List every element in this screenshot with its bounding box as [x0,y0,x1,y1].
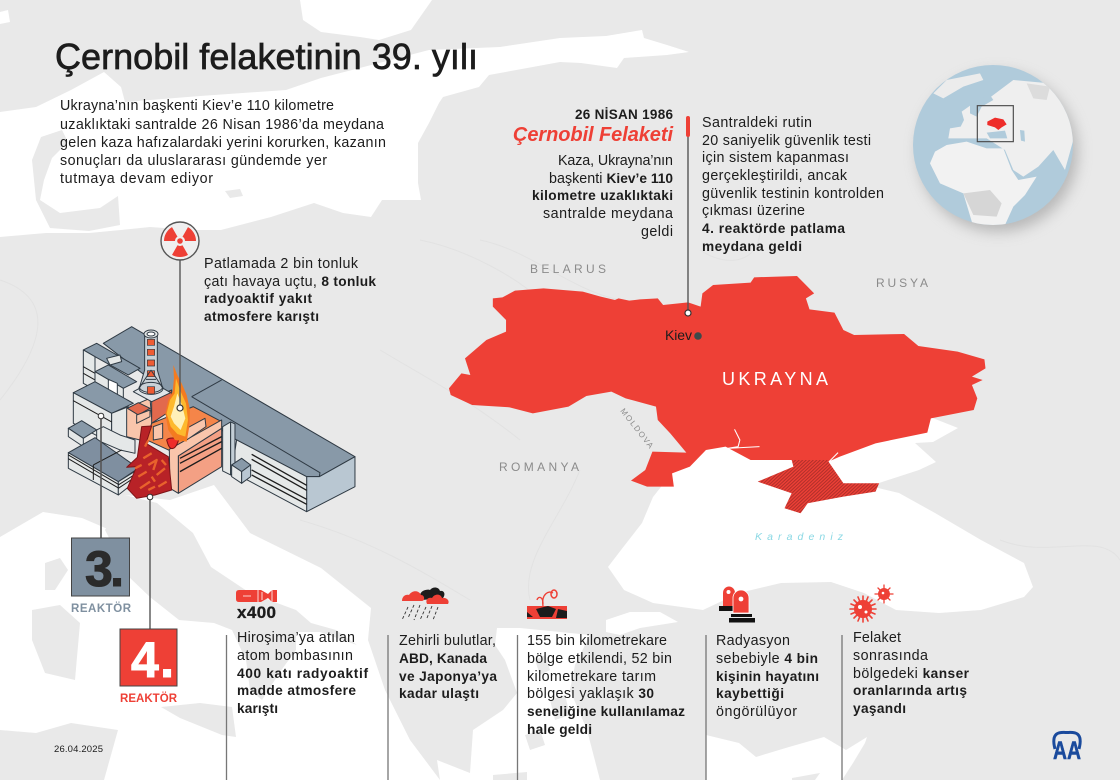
column: clouds: ABD, Kanada [399,651,487,666]
date block: Kaza, Ukrayna’nın [558,153,673,169]
column: clouds [399,633,497,701]
left buildings [68,343,140,495]
main turbine hall [103,327,355,512]
column: deaths: Radyasyon [716,633,790,649]
column: land: kilometrekare tarım [527,669,656,685]
explosion callout: Patlamada 2 bin tonluk [204,256,359,272]
explosion callout: çatı havaya uçtu, 8 tonluk [204,274,376,290]
reactor 4 marker: 4. [131,632,174,688]
Kiev marker: Kiev [665,327,692,343]
right text block: için sistem kapanması [702,150,849,166]
icon: toxic clouds [402,587,449,620]
column: clouds: ve Japonya’ya [399,669,497,684]
right text block: çıkması üzerine [702,203,805,219]
date block [513,107,673,240]
date block: geldi [641,224,673,240]
intro text: Ukrayna’nın başkenti Kiev’e 110 kilometre [60,98,334,114]
country labels [499,262,928,543]
column: cancer: Felaket [853,630,901,646]
icon: sirens [719,586,755,622]
date block: 26 NİSAN 1986 [575,107,673,122]
country labels: UKRAYNA [722,369,828,389]
explosion callout: radyoaktif yakıt [204,291,312,306]
column: land: 155 bin kilometrekare [527,633,667,649]
column: Hiroshima: karıştı [237,701,278,716]
right text block: güvenlik testinin kontrolden [702,186,884,202]
icon: radiation symbol [161,222,199,411]
lava flow [127,426,172,498]
date block: başkenti Kiev’e 110 [549,171,673,187]
fire [165,365,190,442]
column: Hiroshima: 400 katı radyoaktif [237,666,368,681]
column: cancer: yaşandı [853,701,906,716]
column: Hiroshima [237,630,368,716]
column: deaths: kişinin hayatını [716,669,819,684]
date block: santralde meydana [543,206,673,222]
column: land [527,633,685,737]
country labels: BELARUS [530,262,606,276]
right text block: Santraldeki rutin [702,115,812,131]
chimney [133,330,171,402]
column: land: seneliğine kullanılamaz [527,704,685,719]
pillar and annex [223,422,251,483]
date block: Çernobil Felaketi [513,124,673,146]
country labels: ROMANYA [499,460,579,474]
column: cancer: sonrasında [853,648,928,664]
right text block: 20 saniyelik güvenlik testi [702,133,871,149]
date: 26.04.2025 [54,744,103,755]
country labels: MOLDOVA [618,407,655,451]
logo: AA [1053,732,1081,765]
column: clouds: Zehirli bulutlar, [399,633,496,649]
column: cancer [853,630,970,716]
right text block [702,115,884,254]
column: deaths [716,633,819,720]
column: Hiroshima: Hiroşima’ya atılan [237,630,355,646]
title: Çernobil felaketinin 39. yılı [55,36,478,77]
right text block: 4. reaktörde patlama [702,221,845,236]
reactor illustration [68,327,355,512]
column: deaths: sebebiyle 4 bin [716,651,818,667]
column dividers [226,635,842,780]
column: Hiroshima: atom bombasının [237,648,353,664]
reactor 3 marker [71,413,132,615]
column: cancer: oranlarında artış [853,683,967,698]
globe locator [913,65,1078,232]
right text block: gerçekleştirildi, ancak [702,168,848,184]
timeline pointer [685,116,691,316]
column: Hiroshima: madde atmosfere [237,683,356,698]
explosion callout: atmosfere karıştı [204,309,319,324]
map: Ukraine [449,276,985,513]
icon: cracked soil plant [527,590,567,619]
column: deaths: öngörülüyor [716,704,797,720]
intro text: tutmaya devam ediyor [60,171,213,187]
column: clouds: kadar ulaştı [399,686,479,701]
reactor 3 marker: 3. [85,541,124,597]
column: land: hale geldi [527,722,592,737]
reactor 4 marker [120,494,178,705]
column: cancer: bölgedeki kanser [853,666,970,682]
reactor core block [127,390,222,493]
column: land: bölgesi yaklaşık 30 [527,686,654,702]
icon: bomb [236,590,277,602]
intro text: uzaklıktaki santralde 26 Nisan 1986’da meydana [60,117,384,133]
intro text [60,98,386,187]
intro text: gelen kaza hafızalardaki yerini korurken, kazanın [60,135,386,151]
explosion callout [204,256,376,324]
column: land: bölge etkilendi, 52 bin [527,651,672,667]
stat: x400: x400 [237,603,276,622]
country labels: RUSYA [876,276,928,290]
column: deaths: kaybettiği [716,686,784,701]
logo: AA: AA [1053,737,1081,765]
icon: virus [850,585,893,622]
reactor 4 marker: REAKTÖR [120,692,178,705]
country labels: Karadeniz [755,531,844,543]
reactor 3 marker: REAKTÖR [71,602,132,615]
date block: kilometre uzaklıktaki [532,188,673,203]
intro text: sonuçları da uluslararası gündemde yer [60,153,327,169]
right text block: meydana geldi [702,239,802,254]
